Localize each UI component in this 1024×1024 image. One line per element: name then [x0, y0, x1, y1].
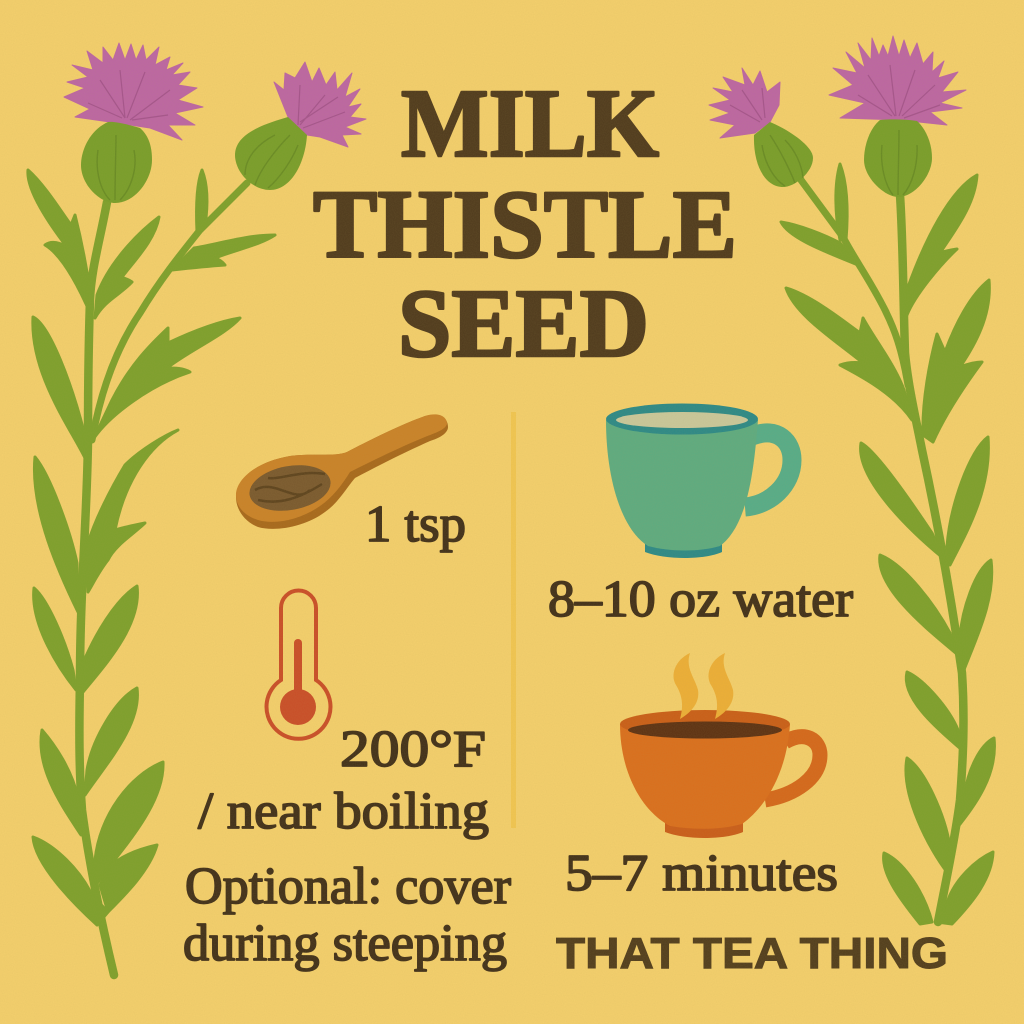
right large flower head	[829, 36, 966, 125]
left small flower head	[274, 62, 366, 147]
icon: wooden spoon	[236, 414, 448, 529]
icon: steam	[674, 653, 733, 719]
right branch stem	[801, 180, 908, 385]
right leaves	[781, 164, 994, 924]
left large flower head	[64, 43, 203, 140]
title: SEED	[398, 270, 649, 378]
left main stem	[79, 202, 114, 975]
plant: left thistle	[28, 43, 366, 975]
left small bud	[235, 117, 307, 190]
divider	[511, 412, 516, 828]
right large bud	[864, 119, 932, 197]
left leaves	[28, 170, 275, 925]
label: temperature: 200°F	[340, 721, 486, 778]
plant: right thistle	[709, 36, 994, 924]
title	[313, 70, 737, 378]
label: temperature: / near boiling	[198, 783, 489, 840]
icon: thermometer	[266, 590, 330, 739]
label: steep time: 5–7 minutes	[565, 845, 838, 902]
label: water amount: 8–10 oz water	[548, 571, 853, 628]
title: MILK	[401, 70, 659, 178]
icon: orange cup	[620, 710, 820, 838]
right main stem	[900, 195, 963, 922]
label: temperature	[198, 721, 489, 840]
label: optional note: during steeping	[183, 915, 507, 972]
right small bud	[754, 122, 813, 187]
label: optional note	[183, 858, 511, 972]
label: optional note: Optional: cover	[185, 858, 511, 915]
title: THISTLE	[313, 171, 737, 279]
right small flower head	[709, 68, 780, 138]
icon: teal cup	[606, 404, 792, 558]
left branch stem	[92, 183, 247, 440]
label: 1 tsp: 1 tsp	[365, 496, 466, 553]
brand: THAT TEA THING	[556, 929, 948, 978]
left large bud	[81, 122, 152, 203]
